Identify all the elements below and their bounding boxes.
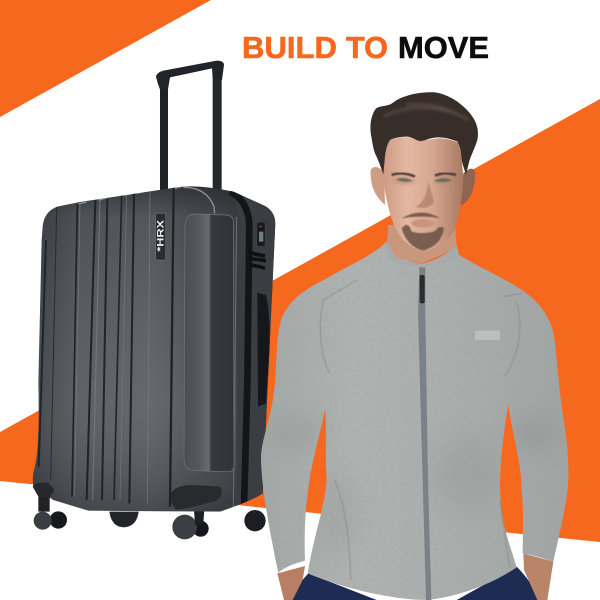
collar [384, 241, 460, 268]
head [370, 92, 478, 268]
logo badge [156, 213, 166, 260]
suitcase [30, 61, 277, 539]
combination lock [248, 223, 266, 268]
moustache and beard [402, 212, 444, 251]
logo badge: *HRX [156, 220, 166, 252]
nose shadow [415, 182, 434, 208]
title word: TO: TO [346, 30, 388, 65]
ears [371, 167, 385, 205]
eye sockets [392, 177, 457, 185]
eyes [396, 178, 452, 182]
side shell [237, 190, 277, 513]
left hand [277, 566, 305, 600]
recessed panel [184, 214, 234, 472]
top edge highlights [78, 186, 215, 213]
vertical ribs [39, 187, 174, 507]
suitcase shell [30, 183, 277, 517]
neck [387, 225, 457, 263]
navy trousers [291, 567, 541, 600]
seams [320, 280, 522, 580]
title word: BUILD: BUILD [242, 30, 337, 65]
zip pull [420, 275, 425, 303]
hair highlights [383, 104, 468, 120]
orange diagonal band [0, 99, 600, 542]
zipper seam [230, 192, 249, 507]
man [261, 242, 568, 600]
lips [411, 219, 434, 227]
hair [370, 92, 478, 174]
corner guards [33, 482, 54, 498]
wheels [34, 495, 266, 539]
chest logo [475, 331, 500, 340]
orange corner triangle [0, 0, 211, 117]
title [242, 30, 489, 65]
face [383, 137, 463, 251]
right hand [523, 553, 553, 600]
side carry handle [257, 293, 270, 407]
soft jacket shading [270, 417, 557, 553]
telescopic handle [156, 61, 224, 190]
zipper [418, 263, 431, 600]
eyebrows [392, 173, 456, 177]
long sleeve jacket [261, 242, 568, 600]
title word: MOVE: MOVE [398, 30, 489, 65]
